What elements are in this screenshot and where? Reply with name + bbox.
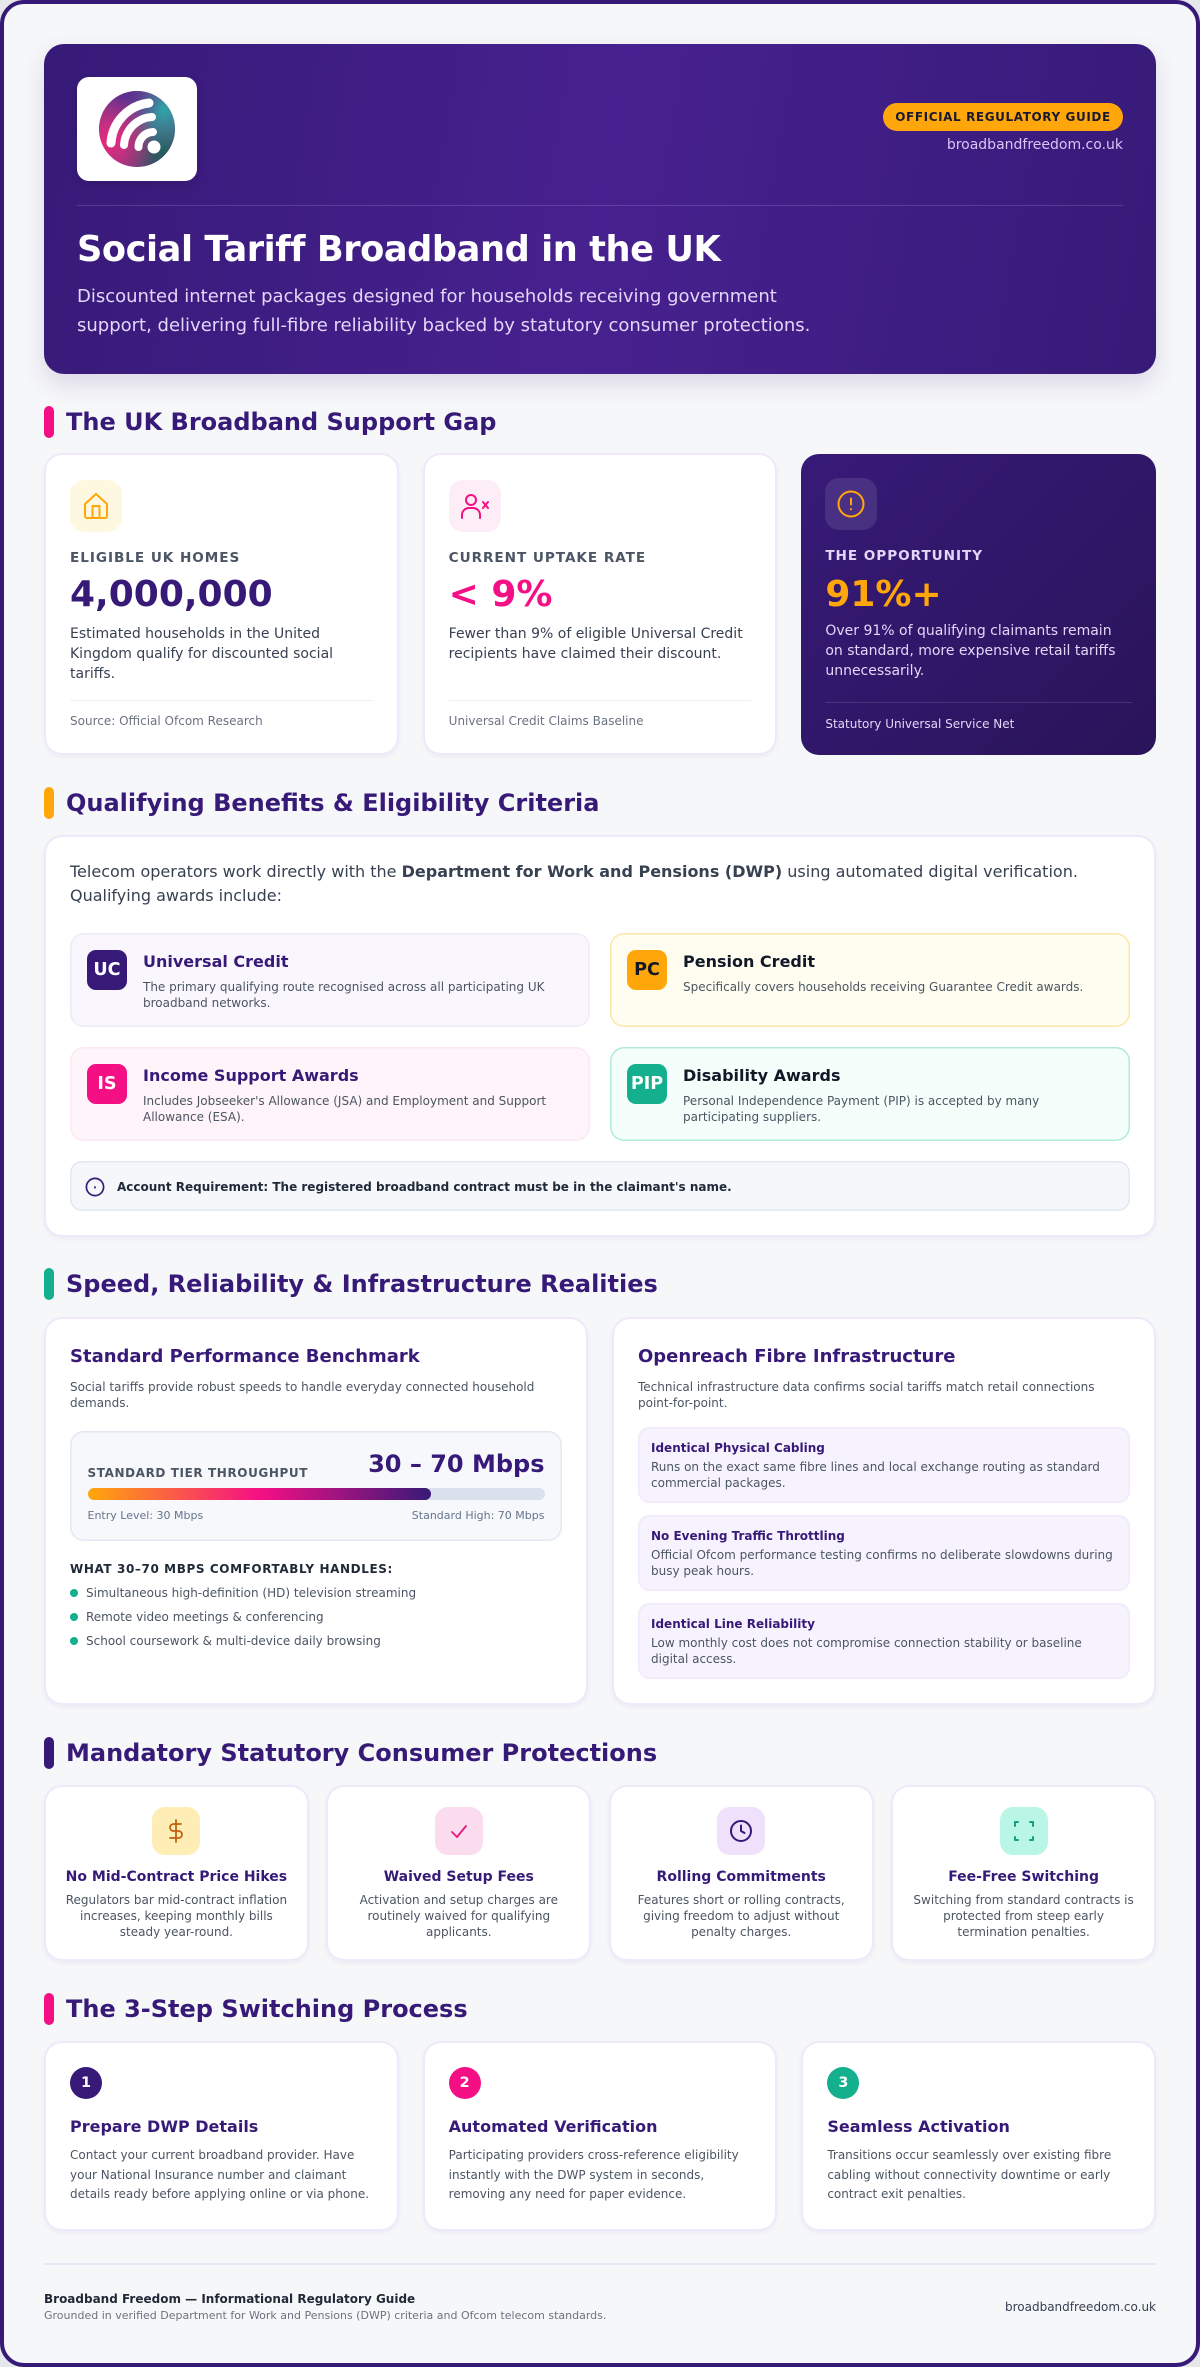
step 3: Transitions occur seamlessly over existing fibre [827,2148,1111,2162]
card: pension credit: PC [634,960,660,980]
description: Fewer than 9% of eligible Universal Credit [449,626,743,642]
step 1 [44,2041,399,2231]
step 1: Contact your current broadband provider. Have [70,2148,354,2162]
card: universal credit: broadband networks. [143,996,270,1010]
heading: speed and infrastructure: Speed, Reliability & Infrastructure Realities [66,1270,658,1298]
fact: reliability: digital access. [651,1652,736,1666]
panel: qualifying benefits [44,835,1156,1237]
fact: throttling: Official Ofcom performance testing confirms no deliberate slowdowns during [651,1548,1113,1562]
callout: account requirement [70,1161,1130,1211]
heading: switching process: The 3-Step Switching Process [66,1995,468,2023]
icon: info [86,1178,104,1196]
subtitle: support, delivering full-fibre reliability backed by statutory consumer protections. [77,315,810,336]
number 3 [827,2067,859,2099]
card: universal credit: UC [93,960,121,980]
card: setup fees: Waived Setup Fees [384,1869,534,1885]
card: setup fees: routinely waived for qualifying [368,1909,550,1923]
badge: official regulatory guide [883,103,1123,131]
intro text [70,862,1078,905]
icon: clock [717,1807,765,1855]
subtitle [77,286,810,336]
card: disability awards [610,1047,1130,1141]
card: fee-free switching [891,1785,1156,1961]
card: universal credit [70,933,590,1027]
icon: alert circle [825,478,877,530]
description [825,623,1116,679]
panel description [638,1380,1094,1410]
card: setup fees: applicants. [426,1925,492,1939]
description: tariffs. [70,666,115,682]
card: price hikes [44,1785,309,1961]
card: setup fees [326,1785,591,1961]
chart: throughput bar [70,1431,562,1541]
panel title: Standard Performance Benchmark [70,1346,420,1366]
card: fee-free switching: Switching from standard contracts is [913,1893,1134,1907]
panel description: Technical infrastructure data confirms social tariffs match retail connections [638,1380,1094,1394]
fact: cabling [638,1427,1130,1503]
stat label: CURRENT UPTAKE RATE [449,550,646,566]
description: Estimated households in the United [70,626,320,642]
card: rolling commitments: giving freedom to adjust without [643,1909,839,1923]
list: uses: Remote video meetings & conferencing [86,1610,324,1624]
card: income support: Includes Jobseeker's Allowance (JSA) and Employment and Support [143,1094,546,1108]
footer note: Grounded in verified Department for Work and Pensions (DWP) criteria and Ofcom telecom standards. [44,2309,606,2322]
card: fee-free switching: termination penalties. [957,1925,1090,1939]
panel description: demands. [70,1396,129,1410]
description: on standard, more expensive retail tariffs [825,643,1116,659]
card: pension credit [610,933,1130,1027]
description: recipients have claimed their discount. [449,646,721,662]
card: pension credit: Pension Credit [683,952,815,971]
icon: user x [449,480,501,532]
logo tile [77,77,197,181]
fact: throttling: busy peak hours. [651,1564,754,1578]
card: price hikes: Regulators bar mid-contract inflation [66,1893,287,1907]
step 2 [423,2041,777,2231]
step 2: Participating providers cross-reference eligibility [449,2148,739,2162]
fact: reliability: Low monthly cost does not compromise connection stability or baseline [651,1636,1082,1650]
fact: cabling: Runs on the exact same fibre lines and local exchange routing as standard [651,1460,1100,1474]
card: price hikes: No Mid-Contract Price Hikes [66,1869,287,1885]
footer [44,2263,1156,2333]
icon: dollar [152,1807,200,1855]
card: disability awards: Disability Awards [683,1066,840,1085]
panel: performance benchmark [44,1317,588,1705]
card: rolling commitments: penalty charges. [691,1925,791,1939]
title: Social Tariff Broadband in the UK [77,229,720,270]
requirement text: Account Requirement: The registered broadband contract must be in the claimant's name. [117,1180,732,1194]
heading: consumer protections: Mandatory Statutory Consumer Protections [66,1739,657,1767]
number 2 [449,2067,481,2099]
header banner [44,44,1156,374]
chart: throughput bar: Entry Level: 30 Mbps [88,1509,203,1522]
step 2: Automated Verification [449,2117,657,2136]
card: fee-free switching: protected from steep early [943,1909,1104,1923]
fact: throttling [638,1515,1130,1591]
protections row [44,1785,1156,1962]
domain label: broadbandfreedom.co.uk [947,136,1123,152]
icon: house [70,480,122,532]
chart: throughput bar: STANDARD TIER THROUGHPUT [88,1466,308,1480]
list: uses: Simultaneous high-definition (HD) television streaming [86,1586,416,1600]
number 1: 1 [81,2075,91,2091]
card: rolling commitments [609,1785,874,1961]
badge: official regulatory guide: OFFICIAL REGULATORY GUIDE [895,110,1111,124]
heading: qualifying benefits: Qualifying Benefits & Eligibility Criteria [66,789,599,817]
step 2: instantly with the DWP system in seconds, [449,2168,704,2182]
description: unnecessarily. [825,663,924,679]
step 3: Seamless Activation [827,2117,1010,2136]
card: setup fees: Activation and setup charges are [360,1893,558,1907]
card: income support: IS [97,1074,117,1094]
source: Statutory Universal Service Net [825,716,1014,730]
card: price hikes: increases, keeping monthly bills [80,1909,273,1923]
list heading: WHAT 30–70 MBPS COMFORTABLY HANDLES: [70,1562,393,1576]
panel: the opportunity [801,454,1156,755]
number 2: 2 [460,2075,470,2091]
source: Universal Credit Claims Baseline [449,714,644,728]
fact: reliability [638,1603,1130,1679]
panel description: point-for-point. [638,1396,727,1410]
description: Kingdom qualify for discounted social [70,646,333,662]
chart: throughput bar: 30 – 70 Mbps [368,1450,544,1478]
subtitle: Discounted internet packages designed for households receiving government [77,286,777,306]
source: Source: Official Ofcom Research [70,714,263,728]
step 3 [801,2041,1156,2231]
card: income support [70,1047,590,1141]
card: rolling commitments: Features short or rolling contracts, [638,1893,845,1907]
description: Over 91% of qualifying claimants remain [825,623,1112,639]
card: price hikes: steady year-round. [120,1925,233,1939]
stat label: THE OPPORTUNITY [825,548,983,564]
card: disability awards: Personal Independence Payment (PIP) is accepted by many [683,1094,1039,1108]
icon: check [435,1807,483,1855]
step 3: contract exit penalties. [827,2187,966,2201]
card: income support: Income Support Awards [143,1066,359,1085]
footer title: Broadband Freedom — Informational Regulatory Guide [44,2292,415,2306]
card: universal credit: The primary qualifying route recognised across all participating UK [143,980,544,994]
panel description [70,1380,534,1410]
panel: openreach infrastructure [612,1317,1156,1705]
steps row [44,2041,1156,2232]
stat value: 91%+ [825,574,942,614]
footer domain: broadbandfreedom.co.uk [1005,2300,1156,2314]
step 1: Prepare DWP Details [70,2117,258,2136]
card: pension credit: Specifically covers households receiving Guarantee Credit awards. [683,980,1083,994]
panel description: Social tariffs provide robust speeds to handle everyday connected household [70,1380,534,1394]
stat value: < 9% [449,574,552,615]
panel: uptake rate [423,453,777,755]
card: disability awards: participating suppliers. [683,1110,821,1124]
fact: cabling: Identical Physical Cabling [651,1441,825,1455]
heading: support gap: The UK Broadband Support Gap [66,408,496,436]
panel title: Openreach Fibre Infrastructure [638,1346,955,1366]
step 3: cabling without connectivity downtime or early [827,2168,1110,2182]
description [70,626,333,682]
panel: eligible homes [44,453,399,755]
stat label: ELIGIBLE UK HOMES [70,550,240,566]
fact: cabling: commercial packages. [651,1476,786,1490]
number 1 [70,2067,102,2099]
fact: reliability: Identical Line Reliability [651,1617,815,1631]
description [449,626,743,662]
card: universal credit: Universal Credit [143,952,288,971]
icon: wifi logo [99,91,175,167]
list: uses: School coursework & multi-device daily browsing [86,1634,381,1648]
list: uses [70,1586,416,1648]
step 1: your National Insurance number and claimant [70,2168,346,2182]
icon: scan corners [1000,1807,1048,1855]
chart: throughput bar: Standard High: 70 Mbps [412,1509,544,1522]
number 3: 3 [838,2075,848,2091]
intro text: Telecom operators work directly with the Department for Work and Pensions (DWP) using automated digital verification. [70,862,1078,881]
card: rolling commitments: Rolling Commitments [657,1869,826,1885]
step 1: details ready before applying online or via phone. [70,2187,369,2201]
card: income support: Allowance (ESA). [143,1110,245,1124]
fact: throttling: No Evening Traffic Throttling [651,1529,845,1543]
card: disability awards: PIP [631,1074,663,1094]
card: fee-free switching: Fee-Free Switching [948,1869,1099,1885]
step 2: removing any need for paper evidence. [449,2187,686,2201]
intro text: Qualifying awards include: [70,886,282,905]
stat value: 4,000,000 [70,574,273,615]
